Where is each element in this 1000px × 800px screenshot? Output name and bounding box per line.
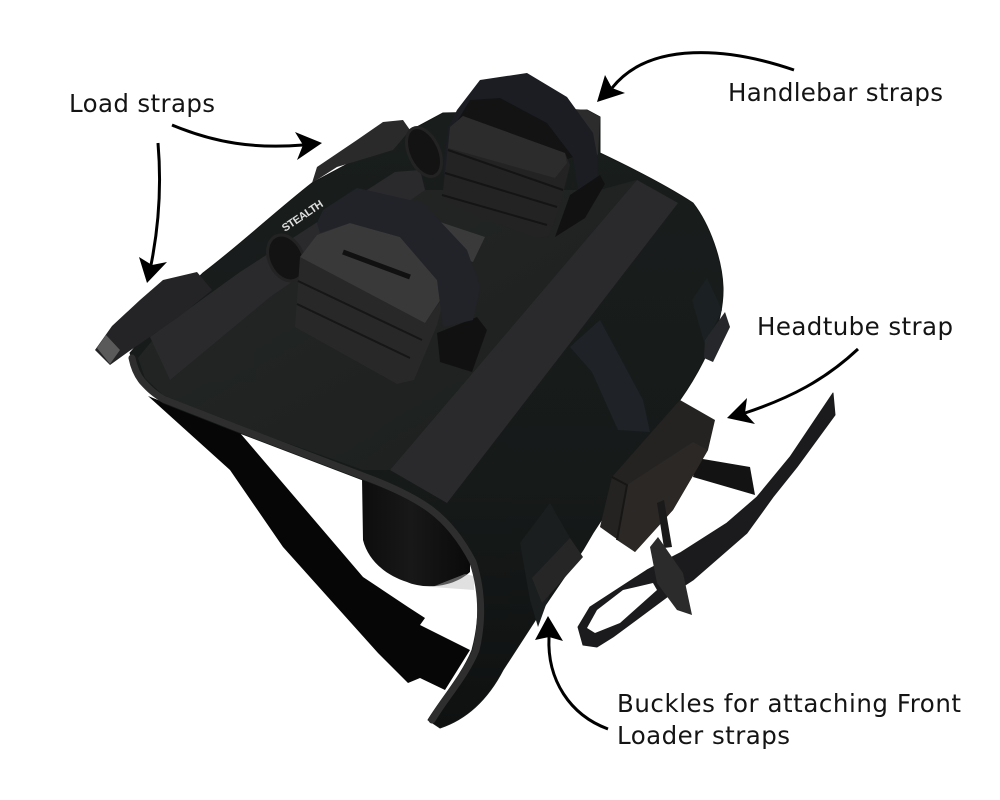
surface reflection xyxy=(432,574,474,590)
main panel xyxy=(130,110,723,728)
arrow: load straps to front buckle xyxy=(139,143,167,283)
arrow: handlebar straps xyxy=(597,53,794,102)
headtube foam block xyxy=(600,400,715,552)
main webbing strap xyxy=(390,180,678,503)
label: headtube strap: Headtube strap xyxy=(757,312,953,341)
label: buckles for attaching front loader straps: Buckles for attaching Front xyxy=(617,689,961,718)
front load strap buckle xyxy=(95,272,212,365)
rear strap underside xyxy=(450,96,573,160)
rear D-ring area xyxy=(555,175,605,237)
label: buckles for attaching front loader straps xyxy=(617,689,961,750)
front D-ring area xyxy=(437,317,487,372)
label: handlebar straps: Handlebar straps xyxy=(728,78,943,107)
rear support strap xyxy=(148,396,470,690)
front handlebar plate xyxy=(440,222,485,262)
STEALTH brand label: STEALTH xyxy=(280,198,326,234)
load strap webbing xyxy=(150,170,425,380)
coiled strap ends xyxy=(260,122,449,287)
rear foam block xyxy=(442,116,570,238)
front handlebar strap xyxy=(317,188,480,327)
rear load strap buckle xyxy=(312,120,410,183)
panel binding edge xyxy=(132,358,481,720)
headtube velcro strap xyxy=(578,393,835,647)
side buckle lower xyxy=(520,503,583,627)
product photo: handlebar harness xyxy=(95,73,835,728)
velcro tab xyxy=(650,500,692,615)
head tube cylinder xyxy=(362,478,470,586)
side buckle upper xyxy=(692,278,730,362)
upper fabric area xyxy=(138,180,637,470)
cross webbing strap xyxy=(570,320,650,432)
front foam block xyxy=(295,223,445,384)
arrow: headtube strap xyxy=(727,349,858,424)
rear handlebar strap xyxy=(443,73,598,203)
arrow: load straps to rear buckle xyxy=(172,125,322,160)
label: load straps: Load straps xyxy=(69,89,215,118)
label: buckles for attaching front loader straps: Loader straps xyxy=(617,721,790,750)
arrow: buckles xyxy=(535,616,608,729)
rear handlebar plate xyxy=(560,108,600,155)
